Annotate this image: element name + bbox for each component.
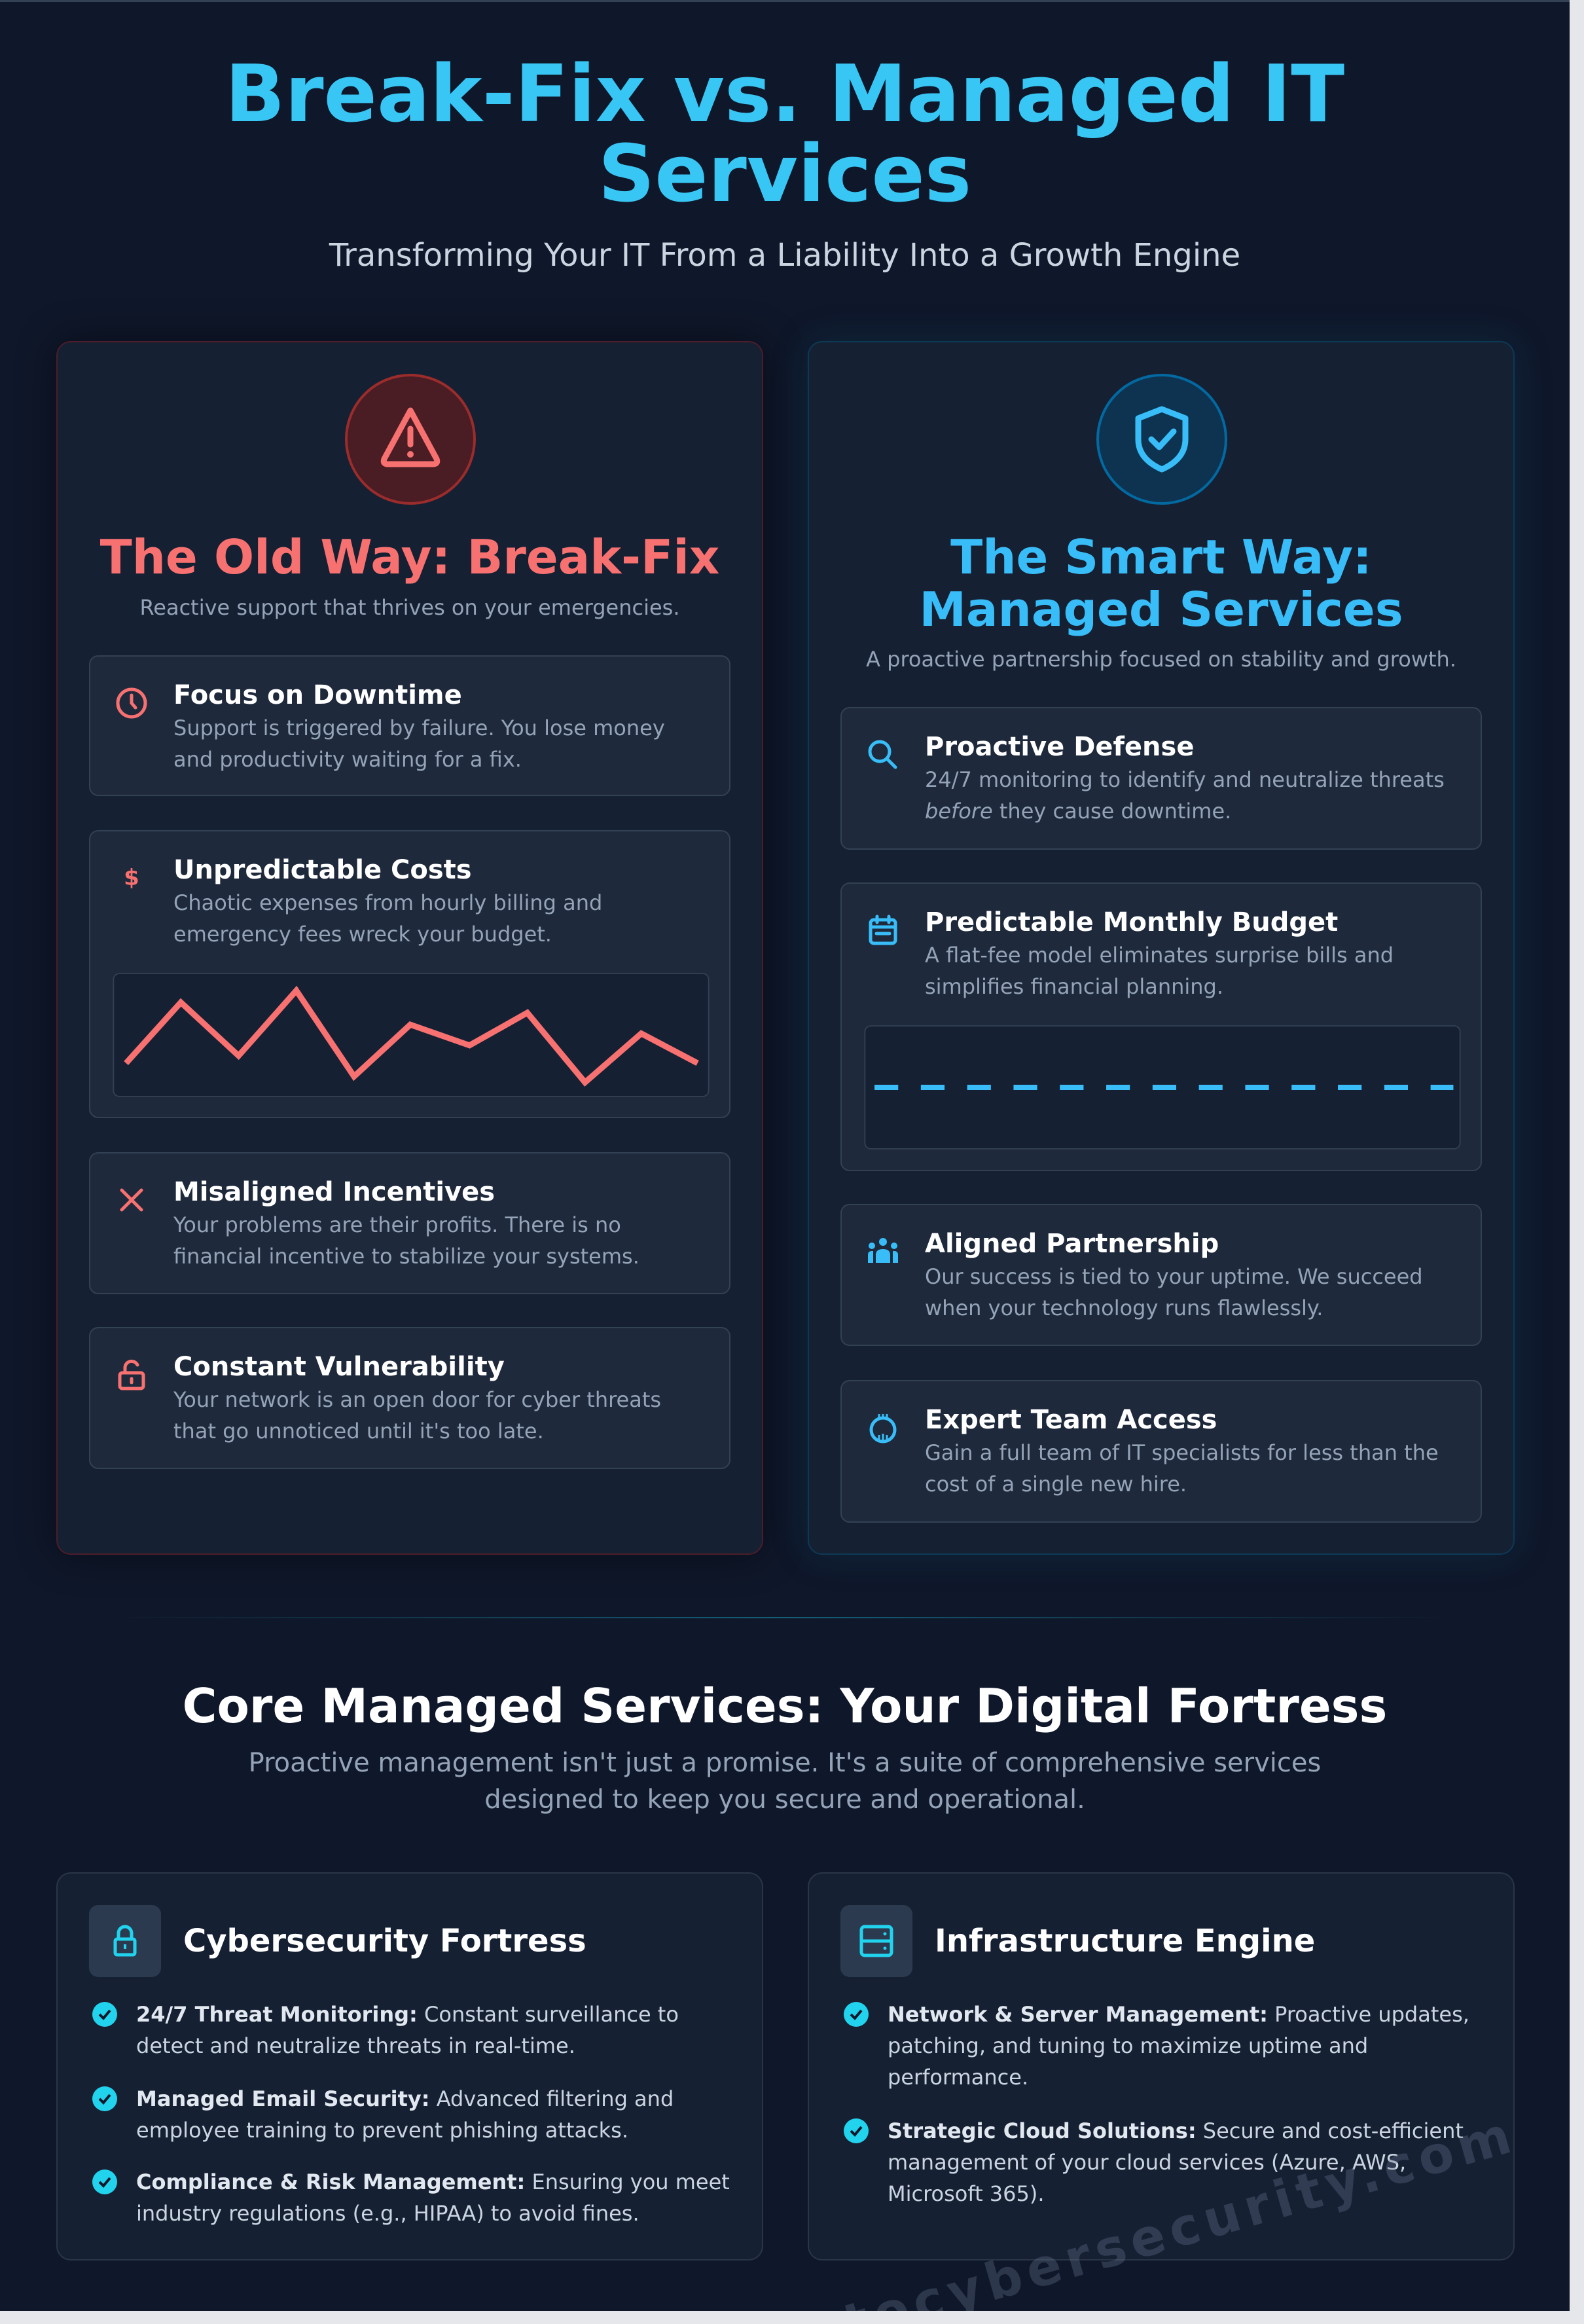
list item: cloud solutions — [844, 2118, 1464, 2206]
card: unpredictable costs: Chaotic expenses from hourly billing and emergency fees wreck your budget. — [173, 890, 602, 947]
list item: email security — [92, 2086, 674, 2143]
heading: old way: The Old Way: Break-Fix — [100, 530, 719, 585]
panel: cybersecurity fortress — [56, 1872, 763, 2260]
heading: Cybersecurity Fortress — [183, 1923, 586, 1959]
card: misaligned incentives — [89, 1152, 730, 1294]
icon: x mark — [120, 1189, 143, 1211]
card: aligned partnership: Our success is tied to your uptime. We succeed when your technology runs flawlessly. — [925, 1264, 1423, 1320]
list item: compliance — [92, 2170, 730, 2226]
section intro text: designed to keep you secure and operational. — [484, 1785, 1085, 1815]
list item: network management — [844, 2002, 1469, 2090]
chart: flat budget line — [864, 1025, 1461, 1150]
icon: calendar — [869, 915, 897, 945]
icon: clock — [117, 687, 147, 719]
card: predictable monthly budget — [840, 882, 1482, 1171]
icon: magnifier — [868, 740, 897, 769]
panel: infrastructure engine: Strategic Cloud Solutions: Secure and cost-efficient management of your cloud services (Azure, AWS, Microsoft 365). — [888, 2118, 1464, 2206]
card: focus on downtime: Focus on Downtime — [173, 680, 462, 710]
icon: expert — [869, 1414, 897, 1443]
card: aligned partnership — [840, 1204, 1482, 1346]
panel: cybersecurity fortress: 24/7 Threat Monitoring: Constant surveillance to detect and neutralize threats in real-time. — [136, 2002, 679, 2058]
section heading: Core Managed Services: Your Digital Fortress — [183, 1679, 1387, 1734]
card: focus on downtime — [89, 655, 730, 796]
heading: smart way — [919, 530, 1403, 637]
card: predictable monthly budget: Predictable Monthly Budget — [925, 907, 1338, 937]
card: proactive defense: 24/7 monitoring to identify and neutralize threats before they cause downtime. — [925, 767, 1445, 824]
icon: group — [868, 1238, 898, 1263]
card: predictable monthly budget: A flat-fee model eliminates surprise bills and simplifies financial planning. — [925, 943, 1394, 999]
card: expert team access: Gain a full team of IT specialists for less than the cost of a single new hire. — [925, 1440, 1439, 1497]
heading: Infrastructure Engine — [935, 1923, 1315, 1959]
card: focus on downtime: Support is triggered by failure. You lose money and productivity waiting for a fix. — [173, 716, 665, 772]
card: misaligned incentives: Your problems are their profits. There is no financial incentive to stabilize your systems. — [173, 1212, 639, 1269]
icon: open lock — [118, 1359, 145, 1390]
panel: old way break-fix — [56, 341, 763, 1555]
card: expert team access: Expert Team Access — [925, 1405, 1217, 1435]
subtitle: Transforming Your IT From a Liability Into a Growth Engine — [329, 237, 1240, 274]
icon: lock box — [89, 1905, 161, 1977]
icon: server box — [840, 1905, 912, 1977]
heading: smart way: The Smart Way: — [950, 530, 1372, 585]
card: misaligned incentives: Misaligned Incentives — [173, 1177, 495, 1207]
subheading: Reactive support that thrives on your emergencies. — [139, 595, 680, 620]
panel: cybersecurity fortress: Compliance & Risk Management: Ensuring you meet industry regulations (e.g., HIPAA) to avoid fines. — [136, 2170, 730, 2226]
title: Break-Fix vs. Managed IT — [225, 49, 1344, 140]
card: proactive defense — [840, 707, 1482, 850]
panel: cybersecurity fortress: Managed Email Security: Advanced filtering and employee training to prevent phishing attacks. — [136, 2086, 674, 2143]
card: constant vulnerability — [89, 1327, 730, 1469]
title: Services — [598, 129, 971, 220]
chart: volatile costs line — [113, 973, 710, 1097]
list item: threat monitoring — [92, 2002, 679, 2058]
panel: smart way managed services — [808, 341, 1515, 1555]
card: unpredictable costs — [89, 830, 730, 1118]
card: proactive defense: Proactive Defense — [925, 732, 1194, 762]
icon: dollar: $ — [124, 865, 139, 891]
subheading: A proactive partnership focused on stability and growth. — [866, 647, 1456, 672]
title — [225, 49, 1344, 220]
section intro text — [249, 1748, 1321, 1815]
icon: shield check — [1096, 374, 1227, 505]
card: unpredictable costs: Unpredictable Costs — [173, 855, 472, 885]
panel: infrastructure engine: Network & Server Management: Proactive updates, patching, and tuning to maximize uptime and performance. — [888, 2002, 1469, 2090]
icon: warning triangle — [345, 374, 476, 505]
card: constant vulnerability: Your network is an open door for cyber threats that go unnoticed until it's too late. — [173, 1387, 661, 1443]
card: expert team access — [840, 1380, 1482, 1523]
heading: smart way: Managed Services — [919, 582, 1403, 637]
section intro text: Proactive management isn't just a promise. It's a suite of comprehensive services — [249, 1748, 1321, 1778]
card: aligned partnership: Aligned Partnership — [925, 1229, 1219, 1259]
card: constant vulnerability: Constant Vulnerability — [173, 1352, 505, 1382]
panel: infrastructure engine — [808, 1872, 1515, 2260]
